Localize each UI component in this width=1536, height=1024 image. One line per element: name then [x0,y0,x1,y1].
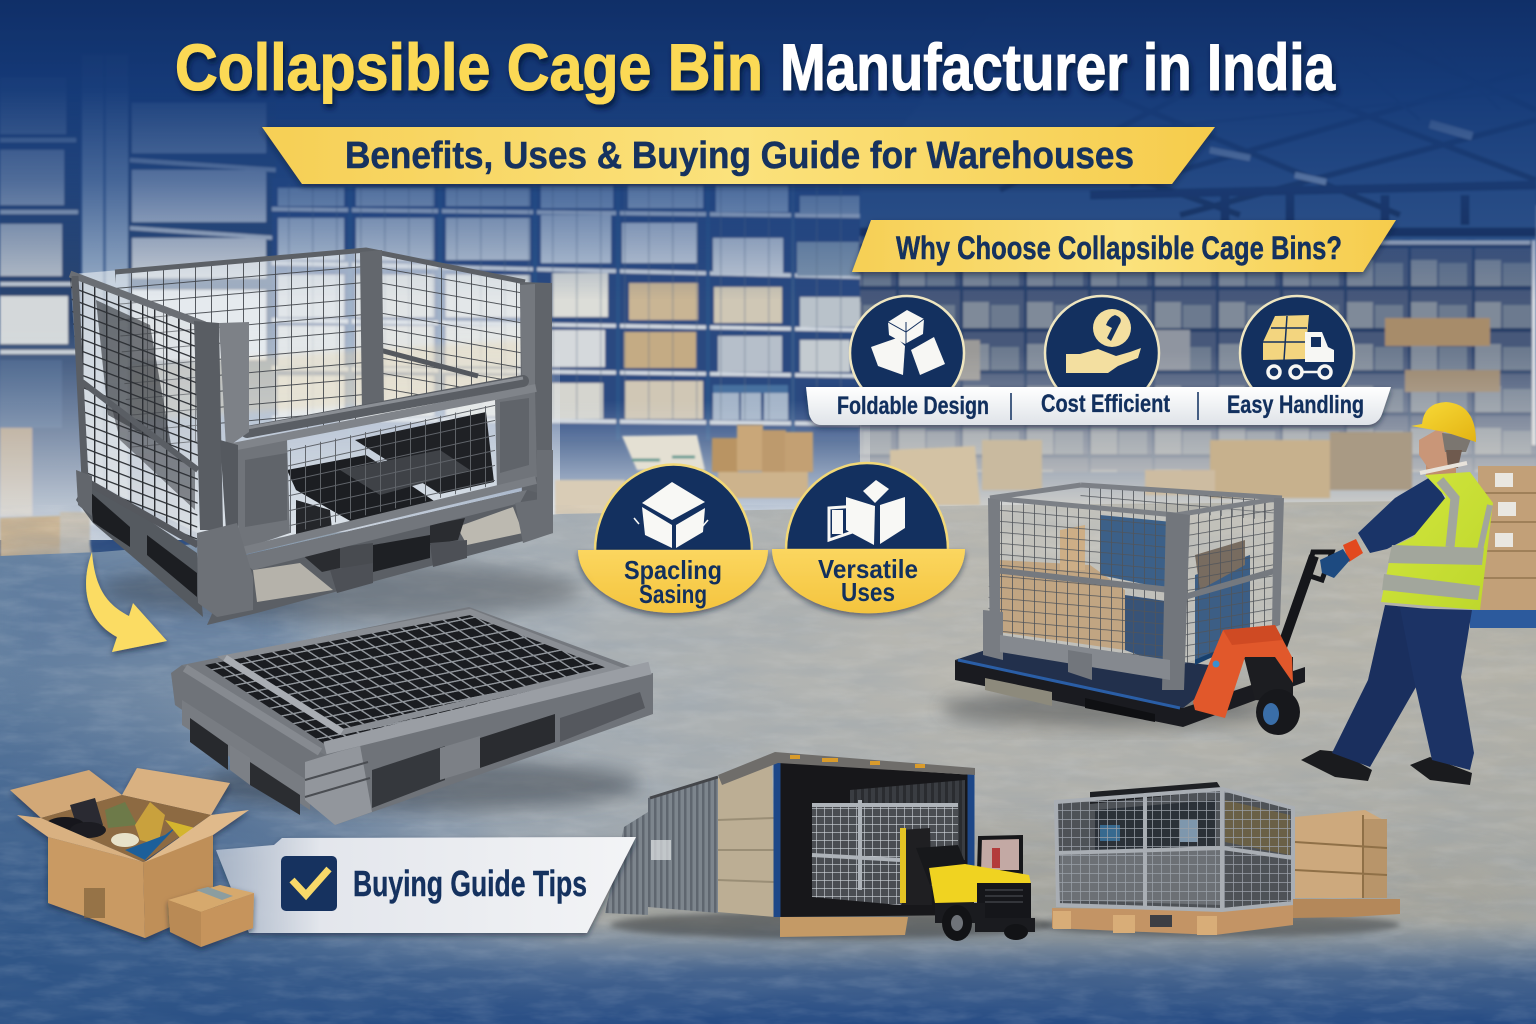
rear mesh panels [1080,485,1282,520]
forklift [900,828,1035,941]
title [175,30,1336,104]
container door panel [718,762,775,917]
left rack [0,60,80,520]
warehouse racks [0,55,1536,525]
top mesh [182,607,649,755]
back mesh walls [115,250,366,450]
top tube [247,381,523,432]
stacked cardboard boxes [1293,810,1400,918]
cage frame [990,485,1282,515]
why choose ribbon [852,220,1396,272]
rear container [605,812,648,915]
badge: versatile uses [772,463,965,613]
corner foot [197,523,253,617]
blue door trim [777,758,971,917]
collar [1420,463,1467,473]
white label band [806,387,1391,425]
trousers [1332,605,1440,767]
banner text: Buying Guide Tips [353,863,587,904]
frame rails [225,612,615,732]
front post [194,321,223,530]
corner block [305,745,372,825]
right foot [515,497,553,543]
pallet [955,660,1305,727]
icon: checkmark [281,856,337,911]
cardboard box with contents [10,768,249,938]
icon: open box [634,482,708,548]
front flaps [17,815,143,862]
center box stack [712,425,813,498]
rack shelves beams [272,209,864,424]
front right mesh [1170,498,1282,670]
barcode [84,888,105,918]
box contents [45,798,195,860]
pillar [82,55,128,525]
left mesh wall [70,274,200,545]
icon: coin in hand [1045,296,1159,410]
row 2 [278,275,344,317]
front left mesh [988,498,1176,670]
right post [520,282,552,510]
center rack backing [272,178,864,440]
stacked cage bin on wooden pallet [1040,782,1400,937]
benefit badges row [806,296,1391,425]
badge: space saving [578,464,768,613]
buying guide banner [216,837,636,933]
cage contents [998,560,1125,650]
row 3 [278,326,344,366]
shipping container with forklift [605,752,1050,941]
container interior [778,762,974,917]
title yellow part: Collapsible Cage Bin [175,30,763,104]
row 0 [278,188,344,206]
front lowered gate [287,404,495,533]
neck [1426,448,1456,476]
front end face [182,700,310,810]
label: cost efficient: Cost Efficient [1041,390,1171,418]
row 4 [278,376,344,416]
floor [0,500,1536,1024]
container side [648,778,718,913]
worker [1301,402,1493,785]
pale area seen through cage [72,250,540,552]
pallet base right face [207,490,553,625]
ceiling [860,0,1536,240]
high-visibility vest [1381,472,1493,610]
right rack [860,236,1536,472]
small cardboard box [168,885,254,947]
label: easy handling: Easy Handling [1227,391,1364,419]
pallet jack [1193,552,1332,735]
icon: foldable boxes [850,296,964,410]
open cage bin [70,250,580,625]
cage body [1055,788,1293,910]
icon: open carton and book [829,480,905,545]
cuff [1343,539,1363,562]
icon: delivery truck [1240,296,1354,410]
hard hat [1411,402,1476,442]
right side openings [372,746,445,808]
label: foldable design: Foldable Design [837,392,989,420]
row 1 [278,218,344,260]
subtitle text: Benefits, Uses & Buying Guide for Warehouses [345,135,1134,177]
box interior [41,795,211,862]
cage bin on pallet jack [940,485,1332,735]
floor texture [0,505,1536,1024]
badge text: Spacling [624,555,722,585]
haze over racks [0,320,560,540]
shoes [1301,750,1372,781]
arrow: fold direction [86,552,167,652]
rack posts [350,178,793,440]
wood pallet [1052,903,1293,935]
box seams [272,184,864,420]
back flaps [10,770,122,818]
subtitle ribbon [262,127,1215,184]
arm [1358,476,1446,553]
why choose heading: Why Choose Collapsible Cage Bins? [896,230,1342,266]
badge: versatile uses: Uses [841,577,895,607]
divider lines [1011,392,1198,420]
pallet base left face [76,478,203,617]
container hazard stickers [790,757,925,766]
floor boxes left [0,515,92,570]
title white part: Manufacturer in India [780,30,1336,104]
wood pallet [780,917,908,937]
cage in container [812,805,958,905]
glove [1320,549,1350,578]
left mid rack [128,85,276,385]
floor slats [287,455,440,522]
right cardboard wall [1470,466,1536,628]
box left and right faces [48,837,145,938]
pallet sides [171,665,653,825]
back corner post [360,250,384,415]
folded cage bin [171,607,653,825]
distant cardboard stacks [0,425,1412,570]
badge text: Versatile [818,554,918,584]
head [1419,428,1450,468]
badge: space saving: Sasing [639,579,707,609]
